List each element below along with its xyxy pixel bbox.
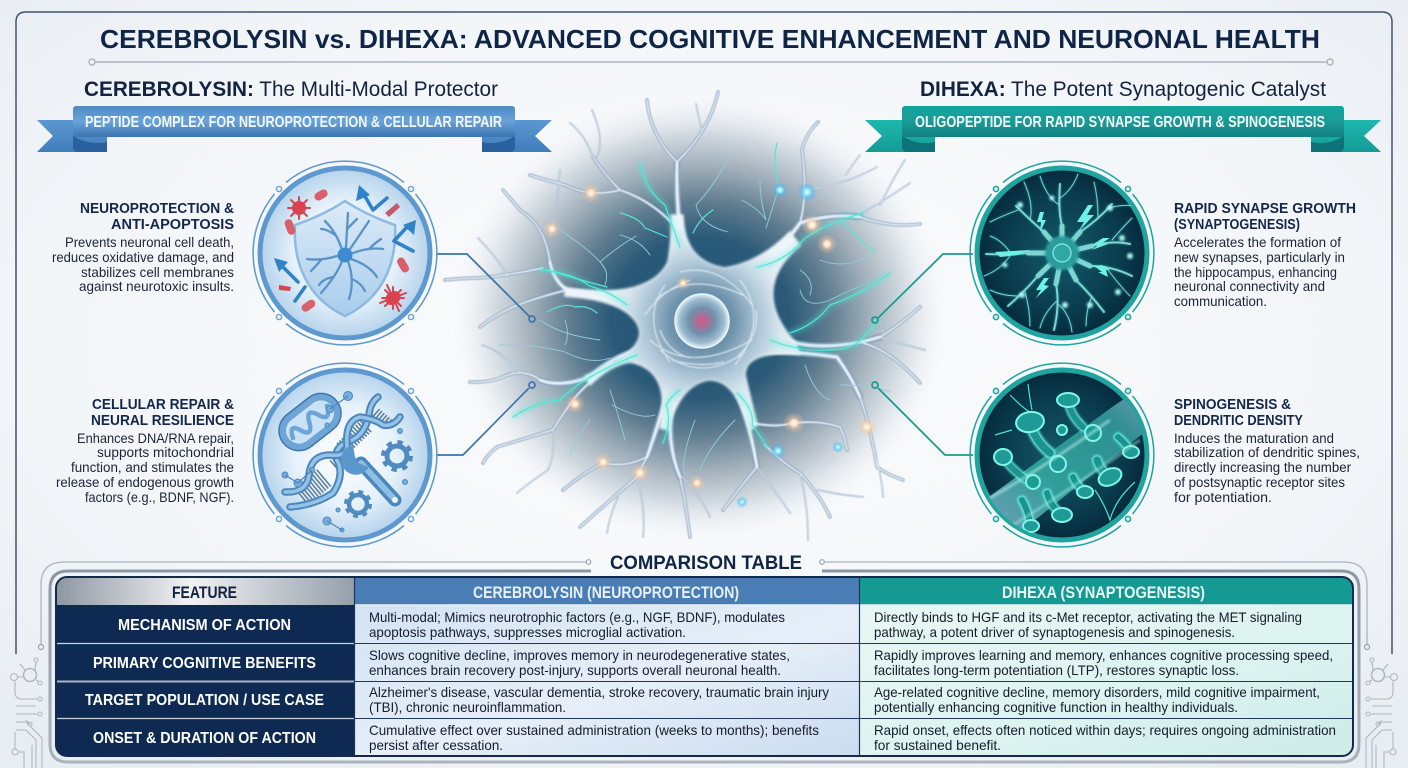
neuron nucleus <box>675 294 729 348</box>
text block: cellular repair: supports mitochondrial <box>97 444 234 460</box>
text block: synapse growth: (SYNAPTOGENESIS) <box>1174 217 1300 233</box>
ribbon: cerebrolysin: PEPTIDE COMPLEX FOR NEUROPROTECTION & CELLULAR REPAIR <box>85 114 502 131</box>
shaft highlights <box>990 420 1110 498</box>
icon: dendritic spines <box>970 363 1160 547</box>
table header row <box>172 584 1205 602</box>
fine dendrite twigs <box>500 155 890 475</box>
text block: synapse growth: communication. <box>1174 293 1267 309</box>
text block: neuroprotection <box>52 201 235 294</box>
table row: mechanism of action: Directly binds to HGF and its c-Met receptor, activating the MET signaling <box>874 609 1302 625</box>
table row: primary cognitive benefits: Rapidly improves learning and memory, enhances cognitive processing speed, <box>874 647 1333 663</box>
neuron soma <box>565 215 800 430</box>
gears <box>346 443 410 516</box>
text block: spinogenesis: Induces the maturation and <box>1174 430 1334 446</box>
text block: cellular repair: CELLULAR REPAIR & <box>92 397 234 413</box>
table row: onset and duration: persist after cessation. <box>369 737 503 753</box>
text block: neuroprotection: against neurotoxic insults. <box>79 278 234 294</box>
table frame lines <box>38 560 1370 762</box>
dendrite shaft <box>989 398 1143 530</box>
table row: onset and duration: Rapid onset, effects often noticed within days; requires ongoing administration <box>874 722 1336 738</box>
table backgrounds <box>56 577 1353 756</box>
text block: neuroprotection: NEUROPROTECTION & <box>80 201 235 217</box>
dna helix <box>285 397 400 507</box>
table row: target population: (TBI), chronic neuroinflammation. <box>369 699 566 715</box>
synapse sparkles <box>543 182 877 508</box>
text block: cellular repair: factors (e.g., BDNF, NGF). <box>85 489 234 505</box>
table row: target population: TARGET POPULATION / USE CASE <box>85 692 324 709</box>
spine glow <box>1003 400 1130 524</box>
text block: cellular repair: release of endogenous growth <box>56 474 234 490</box>
spine heads <box>994 393 1139 532</box>
icon: rapid synapse growth <box>970 161 1154 345</box>
text block: cellular repair: NEURAL RESILIENCE <box>91 413 234 429</box>
table row: onset and duration: Cumulative effect over sustained administration (weeks to months); benefits <box>369 722 819 738</box>
table row: mechanism of action: MECHANISM OF ACTION <box>118 617 291 634</box>
table row: primary cognitive benefits: enhances brain recovery post-injury, supports overall neuronal health. <box>369 662 781 678</box>
text block: synapse growth <box>1174 201 1356 309</box>
heading: dihexa: DIHEXA: The Potent Synaptogenic Catalyst <box>920 78 1326 101</box>
neuron dendrite tree <box>445 92 925 540</box>
text block: spinogenesis: DENDRITIC DENSITY <box>1174 413 1303 429</box>
text block: neuroprotection: stabilizes cell membranes <box>81 264 234 280</box>
text block: synapse growth: RAPID SYNAPSE GROWTH <box>1174 201 1356 217</box>
table row: target population: Age-related cognitive decline, memory disorders, mild cognitive impairment, <box>874 684 1320 700</box>
text block: neuroprotection: reduces oxidative damage, and <box>52 249 234 265</box>
text block: spinogenesis: directly increasing the number <box>1174 459 1351 475</box>
text block: cellular repair <box>56 397 234 505</box>
icon: neuroprotection shield <box>253 161 437 345</box>
table row: onset and duration <box>93 722 1336 753</box>
text block: synapse growth: new synapses, particularly in <box>1174 249 1345 265</box>
text block: neuroprotection: Prevents neuronal cell death, <box>65 234 234 250</box>
table row: target population: potentially enhancing cognitive function in healthy individuals. <box>874 699 1238 715</box>
table row: mechanism of action: apoptosis pathways, suppresses microglial activation. <box>369 624 686 640</box>
ribbon: cerebrolysin <box>37 106 552 152</box>
text block: neuroprotection: ANTI-APOPTOSIS <box>111 217 234 233</box>
table row: mechanism of action: pathway, a potent driver of synaptogenesis and spinogenesis. <box>874 624 1235 640</box>
table row: target population <box>85 684 1320 715</box>
mitochondrion <box>271 385 349 459</box>
ribbon: dihexa <box>865 106 1381 152</box>
leader lines <box>436 254 973 455</box>
heading: cerebrolysin: CEREBROLYSIN: The Multi-Modal Protector <box>84 78 498 101</box>
text block: spinogenesis: SPINOGENESIS & <box>1174 397 1291 413</box>
text block: spinogenesis: stabilization of dendritic spines, <box>1174 444 1360 460</box>
dendrite teal highlights <box>513 143 890 447</box>
text block: synapse growth: neuronal connectivity and <box>1174 278 1325 294</box>
table header row: FEATURE <box>172 584 237 602</box>
text block: cellular repair: Enhances DNA/RNA repair, <box>77 430 234 446</box>
table row: primary cognitive benefits: facilitates long-term potentiation (LTP), restores synaptic loss. <box>874 662 1239 678</box>
table row: primary cognitive benefits: PRIMARY COGNITIVE BENEFITS <box>93 655 316 672</box>
central neuron illustration <box>445 92 950 543</box>
table row: primary cognitive benefits <box>93 647 1333 678</box>
table row: onset and duration: for sustained benefit. <box>874 737 1001 753</box>
spine necks <box>1006 407 1130 520</box>
title divider <box>89 59 1333 65</box>
text block: spinogenesis: of postsynaptic receptor sites <box>1174 474 1345 490</box>
table row: target population: Alzheimer's disease, vascular dementia, stroke recovery, traumatic brain injury <box>369 684 829 700</box>
icon: cellular repair DNA <box>253 363 437 547</box>
text block: spinogenesis <box>1174 397 1360 505</box>
text block: spinogenesis: for potentiation. <box>1174 489 1272 505</box>
circuit motif: bottom left <box>10 658 42 768</box>
text block: synapse growth: the hippocampus, enhancing <box>1174 264 1337 280</box>
text block: cellular repair: function, and stimulates the <box>71 459 234 475</box>
comparison table <box>56 577 1353 756</box>
table row: mechanism of action <box>118 609 1302 640</box>
circuit motif: bottom right <box>1366 658 1398 768</box>
table row: mechanism of action: Multi-modal; Mimics neurotrophic factors (e.g., NGF, BDNF), modulates <box>369 609 785 625</box>
wrench <box>340 445 398 503</box>
soma texture <box>645 270 757 368</box>
molecules <box>282 392 408 532</box>
table row: primary cognitive benefits: Slows cognitive decline, improves memory in neurodegenerative states, <box>369 647 790 663</box>
title: CEREBROLYSIN vs. DIHEXA: ADVANCED COGNITIVE ENHANCEMENT AND NEURONAL HEALTH <box>100 24 1320 54</box>
table header row: DIHEXA (SYNAPTOGENESIS) <box>1002 584 1205 602</box>
comparison table heading: COMPARISON TABLE <box>610 552 802 574</box>
table header row: CEREBROLYSIN (NEUROPROTECTION) <box>473 584 739 602</box>
text block: synapse growth: Accelerates the formation of <box>1174 234 1341 250</box>
table row: onset and duration: ONSET & DURATION OF ACTION <box>93 730 316 747</box>
